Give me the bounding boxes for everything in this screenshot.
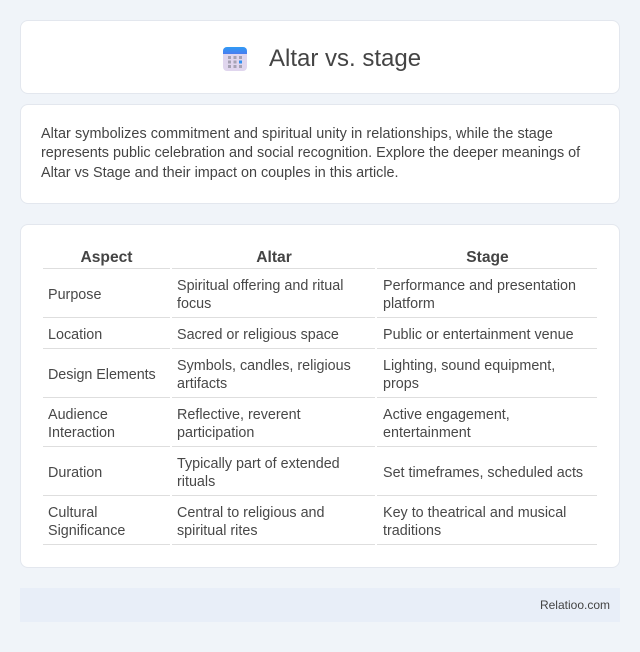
row: Design Elements: Design Elements <box>48 367 156 383</box>
comparison table: platform <box>383 296 435 312</box>
row: Purpose: Purpose <box>48 287 101 303</box>
comparison table: Public or entertainment venue <box>383 327 574 343</box>
comparison table: Symbols, candles, religious <box>177 358 351 374</box>
comparison table: spiritual rites <box>177 523 258 539</box>
intro text: Altar vs Stage and their impact on couples in this article. <box>41 164 399 180</box>
row: Location: Location <box>48 327 102 343</box>
comparison table: Set timeframes, scheduled acts <box>383 465 583 481</box>
row: Duration: Duration <box>48 465 102 481</box>
header: Stage: Stage <box>466 249 509 266</box>
row: Audience Interaction: Interaction <box>48 425 115 441</box>
comparison table: Sacred or religious space <box>177 327 339 343</box>
comparison table: rituals <box>177 474 215 490</box>
row: Cultural Significance: Cultural <box>48 505 97 521</box>
footer text: Relatioo.com <box>540 598 610 612</box>
footer bar <box>20 588 620 622</box>
comparison table: Typically part of extended <box>177 456 340 472</box>
comparison table: Performance and presentation <box>383 278 576 294</box>
intro text: represents public celebration and social recognition. Explore the deeper meanings of <box>41 145 580 161</box>
row: Cultural Significance <box>48 505 125 539</box>
comparison table: Central to religious and <box>177 505 325 521</box>
comparison table: participation <box>177 425 254 441</box>
header: Altar: Altar <box>256 249 292 266</box>
comparison table: Spiritual offering and ritual <box>177 278 343 294</box>
row: Audience Interaction: Audience <box>48 407 108 423</box>
header panel <box>20 20 620 94</box>
title: Altar vs. stage <box>269 45 421 72</box>
comparison table: Active engagement, <box>383 407 510 423</box>
comparison table: Lighting, sound equipment, <box>383 358 555 374</box>
icon: calendar <box>223 47 247 71</box>
intro text: Altar symbolizes commitment and spiritual unity in relationships, while the stage <box>41 126 553 142</box>
comparison table: Reflective, reverent <box>177 407 301 423</box>
comparison table: Key to theatrical and musical <box>383 505 566 521</box>
comparison table: traditions <box>383 523 441 539</box>
comparison table: props <box>383 376 419 392</box>
comparison table: focus <box>177 296 211 312</box>
comparison table: artifacts <box>177 376 227 392</box>
intro text <box>41 126 580 180</box>
table panel <box>20 224 620 568</box>
comparison table: entertainment <box>383 425 471 441</box>
row: Audience Interaction <box>48 407 115 441</box>
row: Cultural Significance: Significance <box>48 523 125 539</box>
intro panel <box>20 104 620 204</box>
header: Aspect: Aspect <box>80 249 132 266</box>
